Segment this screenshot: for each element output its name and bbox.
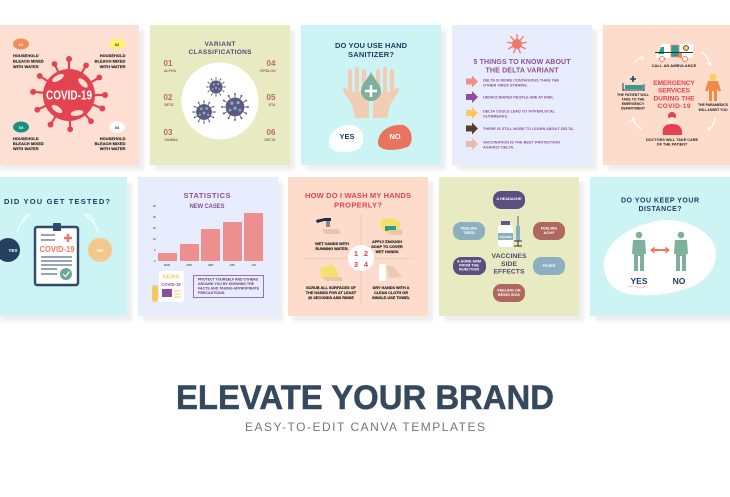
bar chart: JUL [252, 264, 257, 267]
caption: THE PARAMEDICS [698, 103, 729, 107]
label 02: 02 [115, 42, 120, 47]
step 3: SCRUB ALL SURFACES OF [306, 286, 357, 290]
icon: hands with drop [345, 69, 397, 118]
figure right [674, 232, 688, 271]
fact list: AGAINST DELTA. [483, 146, 514, 150]
panel: variant classifications [150, 25, 290, 165]
step 2: WET HANDS [376, 250, 399, 254]
step 4 [372, 264, 411, 300]
double arrow [650, 246, 670, 254]
caption: DEPARTMENT [621, 106, 646, 110]
no circle: NO [97, 248, 104, 253]
caption [617, 93, 650, 110]
card shadows [0, 30, 730, 321]
icon: doctor [663, 112, 682, 135]
step 4: SINGLE-USE TOWEL [372, 296, 411, 300]
variant list: BETA [164, 103, 174, 107]
fact list: OUTBREAKS. [483, 114, 508, 118]
label 03: WITH WATER [13, 146, 39, 151]
step numbers [348, 245, 374, 271]
no blob: NO [389, 132, 401, 141]
icon: orange virus [507, 34, 527, 53]
heading: DO YOU USE HAND [335, 41, 408, 50]
variant list: 03 [164, 128, 173, 137]
caption [646, 138, 699, 146]
label 01: WITH WATER [13, 64, 39, 69]
icon: clipboard: COVID-19 [40, 245, 75, 254]
yes circle: YES [8, 248, 18, 253]
callout: PRECAUTIONS. [198, 291, 225, 295]
label 04: HOUSEHOLD [100, 136, 126, 141]
heading: DISTANCE? [638, 206, 682, 213]
label 03: HOUSEHOLD [13, 136, 39, 141]
panel: statistics [138, 177, 278, 316]
variant list: 02 [164, 93, 173, 102]
figure left [632, 232, 646, 271]
side effect: sick [493, 284, 525, 302]
fact list: UNVACCINATED PEOPLE ARE AT RISK. [483, 96, 554, 100]
no label: NO [673, 276, 686, 286]
bar chart [153, 205, 263, 267]
heading: DID YOU GET TESTED? [4, 197, 110, 206]
heading: DO YOU KEEP YOUR [621, 198, 699, 204]
step 3 [306, 264, 357, 300]
heading: VARIANT [204, 41, 236, 48]
heading: VACCINES [492, 253, 527, 260]
label 03: 03 [19, 125, 24, 130]
fact list: DELTA COULD LEAD TO 'HYPERLOCAL [483, 110, 556, 114]
virus circle [182, 62, 258, 140]
variant list: GAMMA [164, 138, 178, 142]
step 3: THE HANDS FOR AT LEAST [306, 291, 357, 295]
variant list: 05 [267, 93, 276, 102]
caption: OF THE PATIENT [657, 142, 688, 146]
bar chart: 0 [154, 260, 156, 263]
fact list: DELTA IS MORE CONTAGIOUS THAN THE [483, 78, 559, 82]
panel: delta variant facts [452, 25, 592, 165]
panel: hand sanitizer poll [301, 25, 441, 165]
panel: hand washing steps [288, 177, 428, 316]
label 04: BLEACH MIXED [95, 141, 126, 146]
bar chart: MAY [208, 264, 214, 267]
icon: hospital bed [623, 76, 644, 91]
side effect: tired: TIRED [463, 231, 475, 235]
label 02: BLEACH MIXED [95, 58, 126, 64]
bar chart: MAR [164, 264, 170, 267]
fact list: THERE IS STILL MORE TO LEARN ABOUT DELTA. [483, 127, 574, 131]
side effect: achy: FEELING [541, 226, 557, 230]
label 01: 01 [19, 42, 24, 47]
side effect: achy: ACHY [544, 231, 555, 235]
heading [653, 80, 695, 110]
step numbers: 1 [354, 249, 358, 258]
heading: EMERGENCY [653, 80, 695, 87]
icon: syringe [514, 216, 522, 246]
heading [184, 191, 230, 210]
label 02: WITH WATER [100, 64, 126, 69]
icon: newspaper [152, 271, 184, 302]
fact list: VACCINATION IS THE BEST PROTECTION [483, 140, 560, 144]
variant list: DELTA [264, 138, 276, 142]
label 02 [95, 38, 126, 69]
side effect: headache: A HEADACHE [496, 197, 522, 201]
bar chart: 15 [153, 227, 156, 230]
heading [492, 253, 527, 276]
heading: SANITIZER? [348, 50, 394, 59]
icon: ambulance [655, 44, 693, 62]
step 1 [315, 218, 349, 251]
step numbers: 4 [364, 260, 369, 269]
callout: FACTS AND TAKING APPROPRIATE [198, 286, 260, 290]
heading: SERVICES [658, 88, 691, 94]
side effect: achy [533, 222, 565, 240]
bar chart: 25 [153, 205, 156, 208]
icon: newspaper: COVID-19 [161, 282, 181, 287]
heading: NEW CASES [190, 204, 224, 210]
heading: DURING THE [654, 96, 695, 102]
heading: EFFECTS [494, 268, 525, 276]
icon: paramedic [705, 74, 721, 101]
side effect: sore arm: A SORE ARM [457, 260, 481, 264]
bar chart: 20 [153, 216, 156, 219]
callout [194, 276, 264, 298]
callout: AROUND YOU BY KNOWING THE [198, 282, 255, 286]
variant list: 06 [267, 128, 276, 137]
side effect: sick: FEELING OR [497, 288, 521, 292]
virus illustration with COVID-19 label: COVID-19 [46, 88, 92, 102]
cycle arrows [631, 52, 715, 130]
panel: COVID-19 household bleach [0, 25, 139, 165]
callout: PROTECT YOURSELF AND OTHERS [198, 278, 259, 282]
side effect: tired [453, 222, 485, 240]
caption: DOCTORS WILL TAKE CARE [646, 138, 699, 142]
title: ELEVATE YOUR BRAND [176, 379, 554, 417]
variant list [164, 59, 276, 142]
label 04 [95, 122, 126, 151]
bar chart: JUN [229, 264, 235, 267]
step 3: 20 SECONDS AND RINSE [308, 296, 354, 300]
caption: THE PATIENT WILL [617, 93, 650, 97]
panel: vaccine side effects [439, 177, 579, 316]
bar chart: 5 [154, 249, 156, 252]
heading: SIDE [501, 261, 517, 268]
label 03 [13, 122, 44, 151]
label 04: WITH WATER [100, 146, 126, 151]
step 2: APPLY ENOUGH [372, 240, 402, 244]
step 2 [371, 218, 403, 254]
caption: WILL ASSIST YOU [698, 108, 728, 112]
variant list: ALPHA [164, 69, 176, 73]
icon: vaccine bottle: VACCINE [499, 235, 512, 239]
step 2: SOAP TO COVER [371, 245, 403, 249]
heading: THE DELTA VARIANT [486, 68, 559, 74]
variant list: EPSILON [260, 69, 276, 73]
variant list: 01 [164, 59, 173, 68]
heading [335, 41, 408, 59]
panel: emergency services [603, 25, 730, 165]
label 01: HOUSEHOLD [13, 53, 39, 58]
heading: PROPERLY? [334, 200, 382, 210]
heading: CLASSIFICATIONS [188, 49, 252, 56]
step 4: CLEAN CLOTH OR [374, 291, 408, 295]
variant list: 04 [267, 59, 276, 68]
heading: STATISTICS [184, 191, 230, 200]
fact list [466, 76, 574, 150]
heading [474, 59, 571, 74]
heading: COVID-19 [658, 103, 691, 110]
heading: HOW DO I WASH MY HANDS [305, 191, 411, 200]
side effect: tired: FEELING [461, 226, 477, 230]
step 4: DRY HANDS WITH A [373, 286, 410, 290]
label 01 [13, 38, 44, 69]
yes label: YES [630, 276, 648, 286]
caption [698, 103, 729, 112]
white blob [604, 220, 716, 295]
caption: TAKE TO THE [621, 98, 645, 102]
arrows [17, 214, 98, 233]
subtitle: EASY-TO-EDIT CANVA TEMPLATES [245, 420, 485, 434]
label 01: BLEACH MIXED [13, 58, 44, 64]
variant list: ETA [269, 103, 276, 107]
label 03: BLEACH MIXED [13, 141, 44, 146]
label 02: HOUSEHOLD [100, 53, 126, 58]
side effect: fever: FEVER [543, 264, 556, 268]
icon: newspaper: NEWS [163, 274, 180, 280]
step numbers: 3 [354, 260, 358, 269]
caption: CALL AN AMBULANCE [652, 63, 697, 68]
side effect: sick: BEING SICK [498, 293, 520, 297]
bar chart: 10 [153, 238, 156, 241]
step 1: WET HANDS WITH [315, 242, 349, 246]
side effect: sore arm: FROM THE [459, 264, 479, 268]
step 1: RUNNING WATER. [315, 247, 349, 251]
caption: EMERGENCY [622, 102, 645, 106]
panel: keep your distance [590, 177, 730, 316]
bar chart: APR [186, 264, 192, 267]
panel: did you get tested [0, 177, 127, 316]
heading: 5 THINGS TO KNOW ABOUT [474, 59, 571, 66]
step numbers: 2 [364, 249, 368, 258]
yes blob: YES [339, 132, 355, 141]
side effect: sore arm [453, 257, 486, 275]
heading [305, 191, 411, 210]
heading [621, 198, 699, 213]
heading [188, 41, 252, 56]
fact list: OTHER VIRUS STRAINS. [483, 84, 528, 88]
side effect: sore arm: INJECTION [459, 268, 479, 272]
label 04: 04 [115, 125, 120, 130]
